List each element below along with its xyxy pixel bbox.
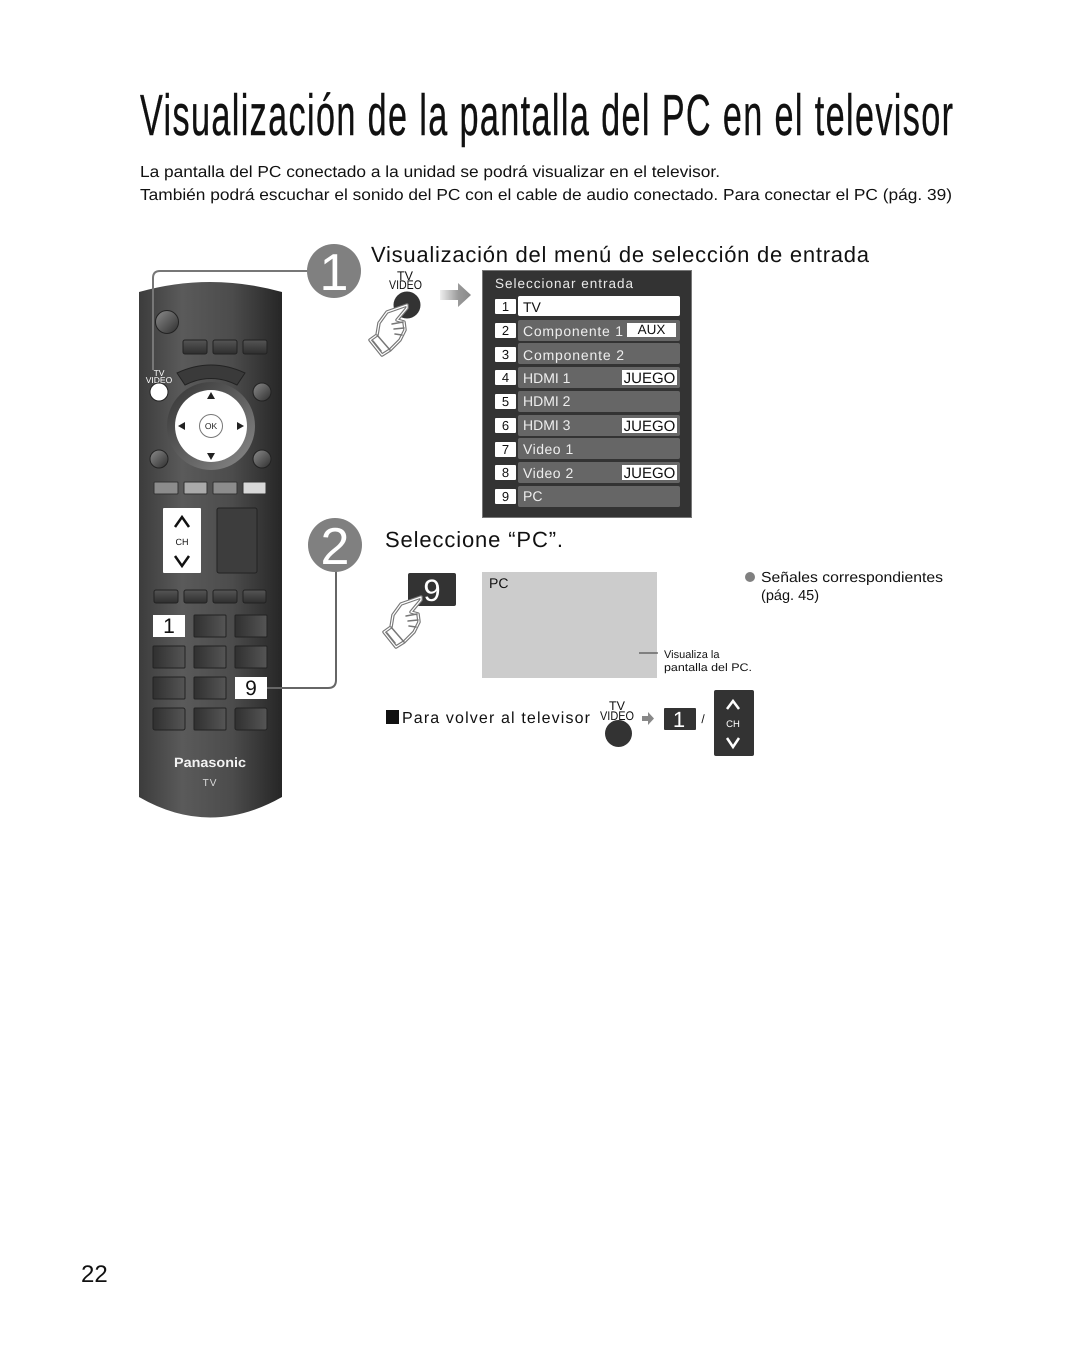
number keypad bbox=[153, 615, 267, 730]
row 2: Componente 1 bbox=[523, 323, 623, 339]
CH key: CH bbox=[726, 719, 740, 730]
row 5: HDMI 2 bbox=[523, 393, 571, 409]
row 6 bbox=[495, 415, 680, 436]
note: supported signals bbox=[745, 570, 943, 604]
callout line: step 2 to key 9 bbox=[267, 570, 336, 688]
round buttons bbox=[150, 383, 271, 468]
step 1 badge bbox=[307, 244, 361, 302]
key 1: 1 bbox=[673, 707, 685, 732]
PC screen bbox=[482, 572, 657, 678]
key 9 highlighted bbox=[235, 677, 267, 700]
key 9 icon: 9 bbox=[423, 573, 441, 608]
screen callout: Visualiza la bbox=[664, 649, 720, 661]
row 2 bbox=[495, 320, 680, 341]
row 5 bbox=[495, 391, 680, 412]
row 3: Componente 2 bbox=[523, 347, 624, 363]
step 1 badge: 1 bbox=[320, 244, 348, 302]
note: supported signals: (pág. 45) bbox=[761, 588, 819, 604]
page number: 22 bbox=[81, 1261, 108, 1288]
arrow to menu bbox=[440, 283, 471, 307]
row 3 bbox=[495, 343, 680, 364]
row 7: 7 bbox=[502, 442, 509, 457]
remote control bbox=[139, 282, 282, 818]
icon: pressing hand bbox=[370, 305, 407, 355]
TV VIDEO small button: VIDEO bbox=[600, 709, 634, 723]
TV VIDEO button highlighted: VIDEO bbox=[146, 375, 173, 385]
TV VIDEO button icon bbox=[389, 269, 422, 318]
icon: pressing hand bbox=[384, 597, 421, 647]
key 1 bbox=[664, 707, 696, 732]
key 1 highlighted: 1 bbox=[163, 615, 175, 638]
callout line: step 1 to TV VIDEO button bbox=[153, 271, 310, 370]
row 6: JUEGO bbox=[624, 418, 675, 435]
row 2: AUX bbox=[638, 322, 665, 337]
return to TV label: Para volver al televisor bbox=[402, 710, 591, 727]
input selection menu bbox=[482, 270, 692, 518]
arrow bbox=[642, 712, 654, 725]
row 8: JUEGO bbox=[624, 465, 675, 482]
title: Visualización de la pantalla del PC en el televisor bbox=[140, 83, 953, 148]
screen callout bbox=[639, 649, 752, 674]
d-pad: OK bbox=[205, 421, 217, 431]
row 1: 1 bbox=[502, 299, 509, 314]
CH key bbox=[714, 690, 754, 756]
input selection menu: Seleccionar entrada bbox=[495, 276, 633, 291]
row 4 bbox=[495, 367, 680, 388]
key 9 highlighted: 9 bbox=[245, 677, 257, 700]
row 6: HDMI 3 bbox=[523, 417, 571, 433]
volume panel bbox=[217, 508, 257, 573]
heading: step 2: Seleccione “PC”. bbox=[385, 527, 563, 552]
slash: / bbox=[701, 712, 705, 726]
intro text: La pantalla del PC conectado a la unidad se podrá visualizar en el televisor. bbox=[140, 164, 720, 181]
row 7 bbox=[495, 438, 680, 459]
screen callout: pantalla del PC. bbox=[664, 662, 752, 674]
row 4: JUEGO bbox=[624, 370, 675, 387]
row 4: HDMI 1 bbox=[523, 370, 571, 386]
row 3: 3 bbox=[502, 347, 509, 362]
CH button highlighted bbox=[163, 508, 201, 573]
row 5: 5 bbox=[502, 394, 509, 409]
colour buttons bbox=[154, 482, 266, 494]
arc button bbox=[177, 365, 245, 385]
TV VIDEO small button: TV bbox=[609, 699, 626, 713]
row 9: PC bbox=[523, 488, 542, 504]
TV VIDEO button icon: VIDEO bbox=[389, 278, 422, 292]
row 8: 8 bbox=[502, 465, 509, 480]
top buttons bbox=[183, 340, 267, 354]
heading: step 1: Visualización del menú de selección de entrada bbox=[371, 242, 870, 267]
row 9 bbox=[495, 486, 680, 507]
intro text bbox=[140, 164, 952, 204]
PC screen: PC bbox=[489, 575, 508, 591]
Panasonic logo: Panasonic bbox=[174, 755, 247, 770]
row 8 bbox=[495, 462, 680, 483]
TV VIDEO button icon: TV bbox=[397, 269, 414, 283]
CH button highlighted: CH bbox=[176, 537, 188, 547]
small button row bbox=[154, 590, 266, 603]
row 1 bbox=[495, 296, 680, 316]
row 1: TV bbox=[523, 299, 542, 315]
TV VIDEO small button bbox=[600, 699, 634, 747]
row 2: 2 bbox=[502, 323, 509, 338]
row 8: Video 2 bbox=[523, 465, 574, 481]
row 9: 9 bbox=[502, 489, 509, 504]
row 4: 4 bbox=[502, 370, 509, 385]
TV VIDEO button highlighted: TV bbox=[154, 368, 165, 378]
key 9 icon bbox=[408, 573, 456, 608]
step 2 badge: 2 bbox=[321, 518, 349, 576]
note: supported signals: Señales correspondientes bbox=[761, 570, 943, 586]
step 2 badge bbox=[308, 518, 362, 576]
row 6: 6 bbox=[502, 418, 509, 433]
row 7: Video 1 bbox=[523, 441, 574, 457]
power button bbox=[156, 310, 178, 334]
intro text: También podrá escuchar el sonido del PC con el cable de audio conectado. Para conectar el PC (pág. 39) bbox=[140, 187, 952, 204]
d-pad bbox=[167, 382, 255, 470]
TV label: TV bbox=[203, 778, 217, 789]
TV VIDEO button highlighted bbox=[146, 368, 173, 401]
key 1 highlighted bbox=[153, 615, 185, 638]
